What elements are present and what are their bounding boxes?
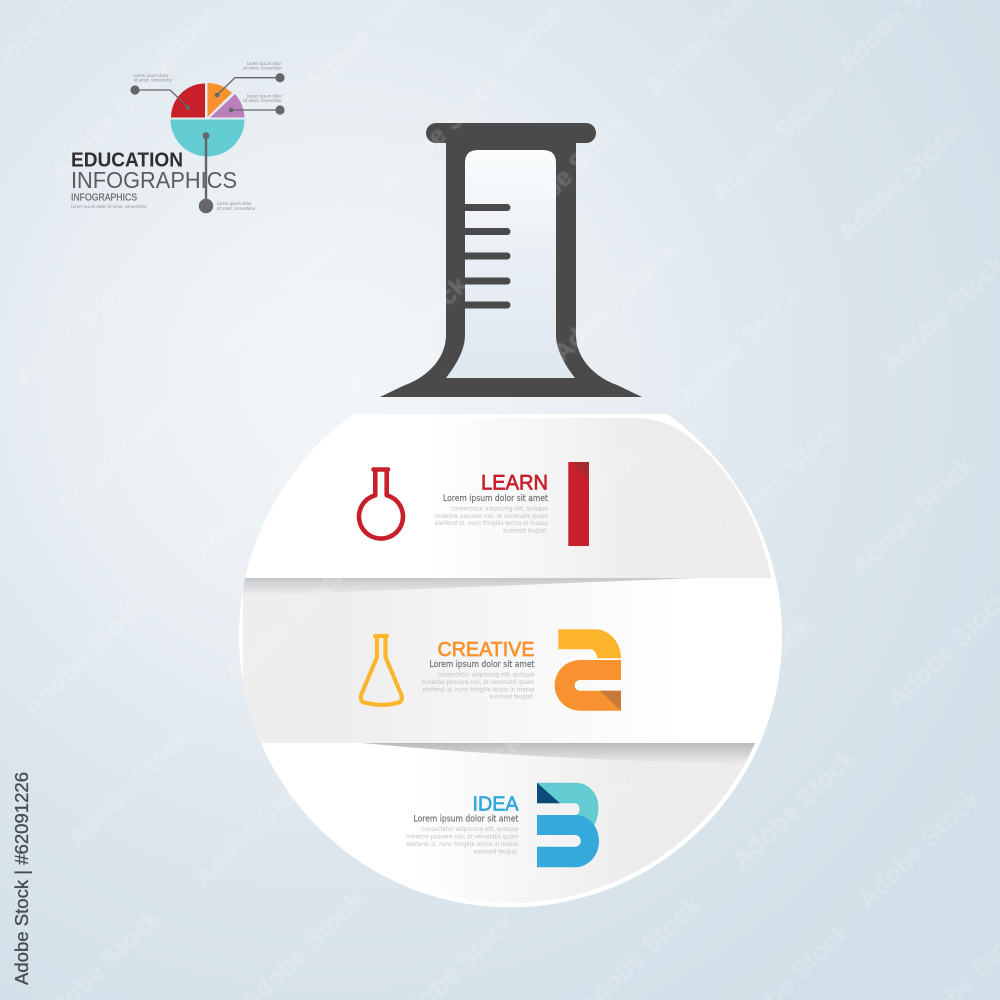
watermarks: Adobe Stock [187, 760, 323, 893]
disk base [239, 414, 782, 907]
band 2 fill [243, 578, 783, 743]
watermarks: Adobe Stock [373, 65, 509, 198]
pie callout captions: sit amet, consectetur [243, 66, 282, 70]
band 1 shadow [243, 578, 695, 592]
watermarks: Adobe Stock [704, 75, 840, 208]
education title: INFOGRAPHICS [71, 192, 137, 204]
watermarks: Adobe Stock [16, 590, 152, 723]
watermarks: Adobe Stock [714, 409, 850, 542]
idea text: molestie posuere nisi, at venenatis quam [406, 835, 519, 841]
education title [71, 150, 237, 210]
watermarks: Adobe Stock [511, 439, 647, 572]
numeral 2 [555, 629, 621, 711]
watermarks: Adobe Stock [851, 782, 987, 915]
education title: EDUCATION [71, 150, 183, 172]
creative text: consectetur adipiscing elit, quisque [438, 673, 535, 679]
learn text: eleifend ut, nunc fringilla lectus in massa [435, 521, 548, 527]
watermarks: Adobe Stock [51, 389, 187, 522]
watermarks: Adobe Stock [681, 610, 817, 743]
idea text: IDEA [472, 794, 519, 816]
creative text: eleifend ut, nunc fringilla lectus in massa [422, 687, 535, 693]
watermarks: Adobe Stock [8, 260, 144, 393]
beaker icon [380, 123, 642, 397]
band 3 fill [507, 755, 744, 902]
watermarks: Adobe Stock [671, 279, 807, 412]
learn text: molestie posuere nisi, at venenatis quam [435, 514, 548, 520]
creative text: CREATIVE [438, 639, 534, 661]
section 1: learn [359, 462, 589, 546]
circular flask body [239, 414, 783, 908]
icon: conical flask [361, 636, 402, 705]
watermarks: Adobe Stock [844, 449, 980, 582]
learn text: Lorem ipsum dolor sit amet [443, 494, 549, 504]
watermarks: Adobe Stock [186, 435, 322, 568]
watermarks: Adobe Stock [546, 235, 682, 368]
numeral 1 [568, 462, 589, 546]
watermarks: Adobe Stock [499, 107, 635, 240]
creative text [422, 639, 535, 701]
watermarks: Adobe Stock [213, 229, 349, 362]
education title: Lorem ipsum dolor sit amet, consectetur [71, 204, 147, 210]
watermarks: Adobe Stock [726, 742, 862, 875]
creative text: Lorem ipsum dolor sit amet [430, 660, 535, 670]
watermarks: Adobe Stock [556, 555, 692, 688]
pie callout captions: Lorem ipsum dolor [247, 94, 282, 98]
education title: INFOGRAPHICS [71, 167, 237, 193]
watermarks: Adobe Stock [504, 769, 640, 902]
learn text [435, 471, 549, 534]
creative text: molestie posuere nisi, at venenatis quam [422, 680, 535, 686]
idea text: Lorem ipsum dolor sit amet [414, 815, 519, 825]
learn text: consectetur adipiscing elit, quisque [451, 506, 548, 512]
band 3 shadow [364, 743, 755, 762]
creative text: euismod feugiat. [490, 695, 535, 701]
idea text: consectetur adipiscing elit, quisque [422, 827, 519, 833]
watermarks: Adobe Stock [338, 269, 474, 402]
watermarks: Adobe Stock [391, 727, 527, 860]
pie callout captions: sit amet, consectetur [243, 98, 282, 103]
idea text: euismod feugiat. [474, 850, 519, 856]
pie callout captions: sit amet, consectetur [217, 206, 256, 211]
pie callout lines [135, 78, 280, 206]
stock id vertical label: Adobe Stock | #62091226 [12, 772, 32, 985]
pie callout captions [134, 61, 282, 211]
section 2: creative [361, 629, 621, 711]
watermarks: Adobe Stock [831, 115, 967, 248]
pie callout captions: Lorem ipsum dolor [247, 61, 282, 66]
idea text: eleifend ut, nunc fringilla lectus in massa [406, 842, 519, 848]
pie callout captions: sit amet, consectetur [134, 78, 173, 82]
watermarks: Adobe Stock [378, 389, 514, 522]
pie chart legend block [71, 61, 285, 213]
watermarks: Adobe Stock [44, 52, 180, 185]
pie callout captions: Lorem ipsum dolor [217, 201, 252, 206]
icon: round flask [359, 470, 403, 539]
learn text: LEARN [481, 471, 548, 494]
pie chart [170, 83, 244, 156]
learn text: euismod feugiat. [503, 528, 548, 534]
watermarks: Adobe Stock [61, 720, 197, 853]
idea text [406, 794, 519, 856]
pie callout dots [130, 73, 285, 213]
band 1 fill [524, 418, 772, 578]
section 3: idea [406, 783, 599, 867]
numeral 3 [537, 783, 599, 867]
watermarks: Adobe Stock [218, 557, 354, 690]
pie callout captions: Lorem ipsum dolor [134, 73, 169, 78]
